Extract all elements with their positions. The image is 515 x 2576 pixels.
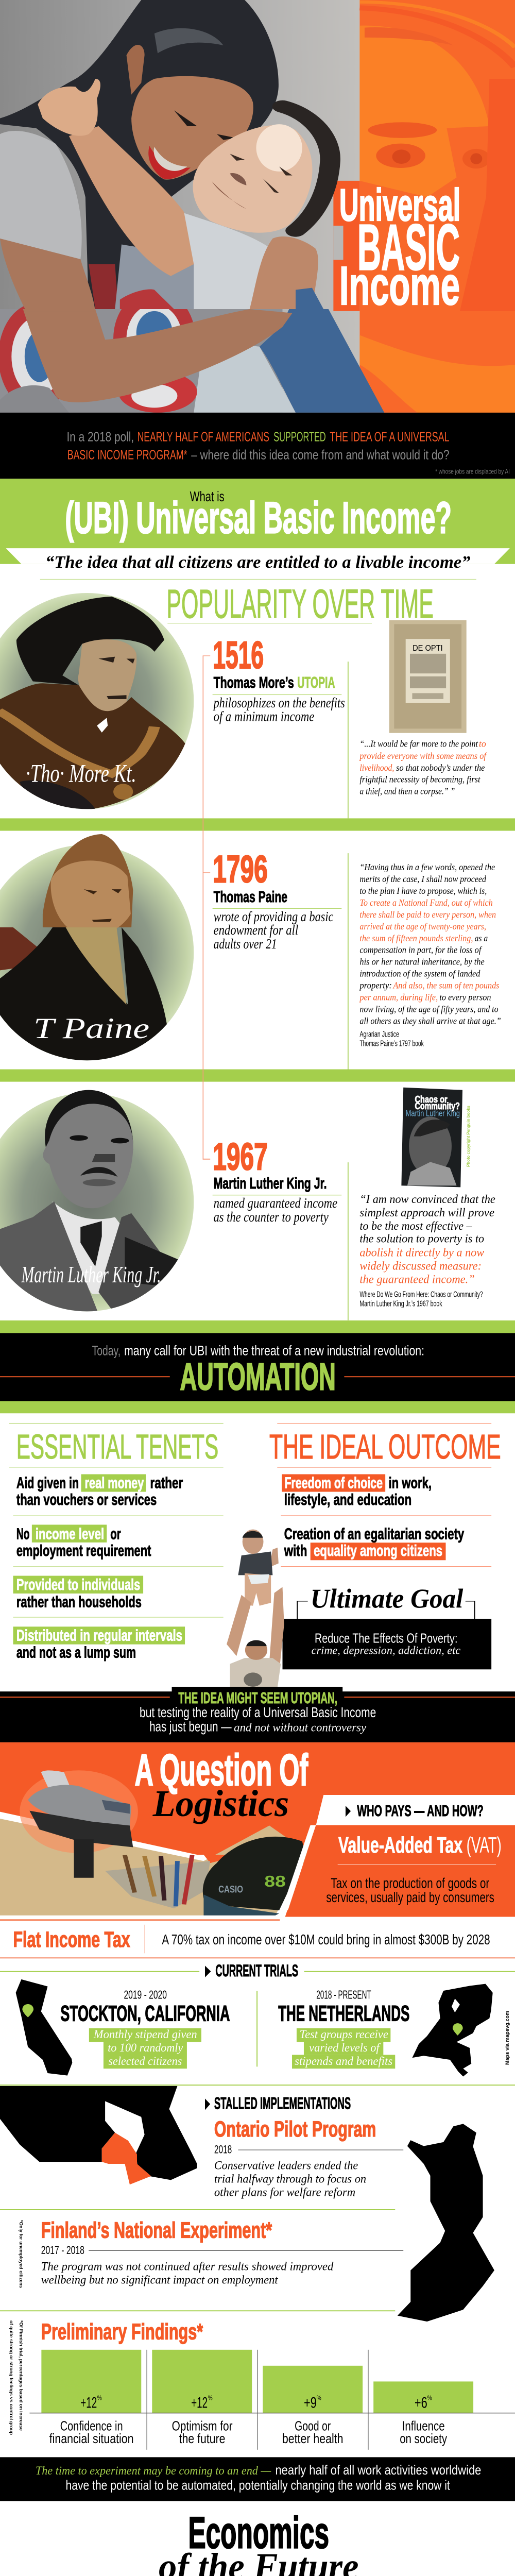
quote: Utopia: livelihood,	[359, 763, 394, 773]
trial: Ontario pilot program: other plans for welfare reform	[214, 2185, 355, 2199]
heading: a question of logistics: Logistics	[152, 1783, 289, 1824]
quote: Utopia	[359, 739, 487, 796]
text: basic endowment: adults over 21	[214, 936, 277, 952]
trial: Netherlands: 2018 - PRESENT	[316, 1988, 371, 2001]
text: 2018 poll statement: SUPPORTED	[273, 429, 326, 444]
trial: Netherlands	[278, 1988, 409, 2069]
panel: 1796 Thomas Paine	[213, 848, 501, 1070]
trial: Stockton: to 100 randomly	[108, 2041, 183, 2055]
panel: time to experiment band	[0, 2457, 515, 2501]
trial: Ontario pilot program: Conservative leaders ended the	[214, 2159, 358, 2173]
heading: stalled implementations	[205, 2094, 351, 2113]
chart: preliminary findings bars: Influence	[402, 2418, 445, 2433]
title: Universal Basic Income	[339, 179, 460, 316]
outcome: freedom of choice: Freedom of choice	[284, 1474, 383, 1492]
quote: Agrarian Justice: property:	[359, 980, 392, 991]
panel: automation band	[0, 1320, 515, 1413]
tenet: real money	[16, 1474, 183, 1509]
values: percent increases: +9	[304, 2394, 317, 2411]
panel: the idea might seem utopian	[0, 1687, 515, 1742]
labels: findings categories: financial situation	[49, 2431, 134, 2446]
text: 2018 poll statement: In a 2018 poll,	[66, 429, 134, 444]
heading: Thomas More's Utopia	[214, 673, 335, 691]
tenet: income level: or	[110, 1525, 121, 1543]
quote: Agrarian Justice	[359, 862, 501, 1048]
panel: essential tenets: Distributed in regular intervals	[16, 1626, 182, 1644]
outcome: egalitarian society: with	[284, 1541, 307, 1559]
text: Finland details	[41, 2244, 403, 2286]
trial: Netherlands: Test groups receive	[300, 2027, 388, 2041]
heading: Thomas More's Utopia: Thomas More’s	[214, 673, 294, 691]
text: basic endowment: endowment for all	[214, 922, 298, 938]
panel: essential tenets: rather	[150, 1474, 183, 1492]
text: philosophizes	[213, 695, 345, 724]
labels: findings categories: Good or	[295, 2418, 331, 2433]
portrait: Martin Luther King Jr.	[0, 1090, 197, 1314]
panel: 1967 Martin Luther King: 1967	[213, 1135, 268, 1178]
panel: the ideal outcome	[227, 1423, 501, 1687]
panel: current trials	[0, 1962, 515, 2086]
panel: 1967 Martin Luther King: Community?	[415, 1101, 460, 1111]
quote: Utopia: to	[479, 739, 486, 749]
trial: Ontario pilot program	[214, 2117, 403, 2199]
panel: essential tenets: rather than households	[16, 1593, 142, 1611]
panel: 1796 Thomas Paine: Thomas Paine	[214, 888, 287, 906]
tenet: provided to individuals	[13, 1575, 143, 1611]
signature: T Paine: T Paine	[33, 1012, 149, 1045]
panel: flat income tax: Flat Income Tax	[13, 1927, 130, 1952]
panel: 1796 Thomas Paine: wrote of providing a basic	[214, 909, 333, 925]
image: Chaos or Community book	[401, 1088, 462, 1187]
portrait: Thomas More	[0, 593, 194, 809]
heading: current trials	[205, 1962, 298, 1980]
heading: what is UBI: What is	[190, 489, 225, 505]
text: 2018 poll statement	[66, 429, 510, 475]
labels: findings categories: Optimism for	[172, 2418, 233, 2433]
photo: desk with terminal and cash register: CASIO	[218, 1884, 243, 1895]
quote: Chaos or Community	[359, 1193, 495, 1308]
panel: current trials: STOCKTON, CALIFORNIA	[60, 2002, 230, 2026]
text: guaranteed income: as the counter to poverty	[214, 1209, 329, 1225]
timeline: orange vertical connector	[203, 655, 210, 1160]
tenet: regular intervals: and not as a lump sum	[16, 1643, 136, 1661]
text: today: Today,	[92, 1343, 121, 1359]
image: Utopia book cover: DE OPTI	[413, 644, 443, 653]
chart: preliminary findings bars: on society	[400, 2431, 447, 2446]
photo: desk with terminal and cash register: 88	[264, 1872, 286, 1890]
trial: Netherlands: varied levels of	[309, 2041, 381, 2055]
panel: stalled implementations	[0, 2086, 403, 2199]
trial: Ontario pilot program: 2018	[214, 2143, 232, 2156]
text: basic endowment	[214, 909, 333, 952]
text: Finland details: wellbeing but no significant impact on employment	[41, 2273, 278, 2286]
panel: 1516 Thomas More: UTOPIA	[297, 673, 335, 691]
panel: essential tenets	[9, 1423, 224, 1661]
caption: finnish trial note: *Of Finnish trial, percentages based on increase	[18, 2320, 24, 2431]
caption: maps credit: Maps via mapsvg.com	[505, 2011, 510, 2065]
quote: Agrarian Justice: as a	[475, 934, 488, 943]
panel: flat income tax	[0, 1925, 515, 1958]
labels: findings categories	[49, 2418, 447, 2446]
values: percent increases: %	[317, 2394, 321, 2401]
text: Martin Luther King Jr.	[21, 1261, 161, 1287]
panel: what is UBI	[0, 479, 515, 580]
panel: intro poll band	[0, 413, 515, 479]
caption: only for unemployed: *Only for unemployed citizens	[18, 2220, 24, 2288]
panel: 1516 Thomas More	[213, 620, 487, 818]
trial: Netherlands: stipends and benefits	[295, 2055, 392, 2068]
panel: current trials: CURRENT TRIALS	[215, 1962, 298, 1980]
caption: finnish trial note	[8, 2320, 24, 2435]
values: percent increases: +12	[80, 2394, 97, 2411]
text: philosophizes: of a minimum income	[214, 709, 314, 724]
panel: time to experiment band: The time to experiment may be coming to an end —	[36, 2464, 271, 2478]
outcome: freedom of choice	[282, 1474, 432, 1509]
tenet: real money: than vouchers or services	[16, 1491, 157, 1509]
values: percent increases: %	[208, 2394, 213, 2401]
tenet: income level: No	[16, 1525, 29, 1543]
panel: 1516 Thomas More: philosophizes on the benefits	[213, 695, 345, 711]
chart: preliminary findings bars	[29, 2319, 515, 2450]
image: Chaos or Community book: Chaos or	[415, 1094, 448, 1105]
panel: the idea might seem utopian: and not without controversy	[234, 1721, 367, 1734]
text: 2018 poll statement: BASIC INCOME PROGRAM*	[67, 447, 187, 462]
tenet: real money: real money	[85, 1474, 144, 1492]
caption: photo copyright: Photo copyright Penguin books	[466, 1105, 471, 1167]
panel: essential tenets: Provided to individuals	[16, 1575, 140, 1594]
trial: Stockton: Monthly stipend given	[93, 2027, 197, 2041]
values: percent increases: +6	[415, 2394, 427, 2411]
heading: economics of the future	[159, 2508, 358, 2576]
chart: preliminary findings bars: Preliminary Findings*	[41, 2319, 203, 2344]
labels: findings categories: better health	[282, 2431, 344, 2446]
panel: 1967 Martin Luther King	[213, 1088, 495, 1320]
chart: preliminary findings bars: %	[427, 2394, 432, 2401]
text: value-added tax	[326, 1832, 502, 1905]
divider band	[0, 1070, 515, 1082]
caption: finnish trial note: of quite strong or strong feelings vs control group	[8, 2320, 14, 2435]
labels: findings categories: Confidence in	[60, 2418, 123, 2433]
trial: Ontario pilot program: trial halfway through to focus on	[214, 2172, 366, 2186]
image: Utopia book cover	[389, 620, 467, 733]
panel: orange Franklin banknote	[333, 0, 515, 413]
map: Canada with Ontario	[0, 2086, 197, 2184]
tenet: real money: Aid given in	[16, 1474, 79, 1492]
values: percent increases	[80, 2394, 432, 2411]
panel: hero	[0, 0, 515, 413]
callout: ultimate goal	[283, 1583, 491, 1669]
portrait: Thomas Paine	[0, 834, 194, 1061]
trial: Stockton: 2019 - 2020	[124, 1988, 167, 2001]
map: Finland	[398, 2124, 494, 2321]
heading: a question of logistics	[134, 1745, 308, 1824]
trial: Stockton	[60, 1988, 230, 2069]
map: California	[16, 1979, 72, 2076]
text: Finland details: 2017 - 2018	[41, 2244, 84, 2257]
callout: who pays and how	[316, 1795, 515, 1825]
outcome: egalitarian society	[284, 1525, 465, 1560]
text: 2018 poll statement: NEARLY HALF OF AMERICANS	[138, 429, 269, 444]
labels: findings categories: the future	[179, 2431, 226, 2446]
tenet: income level: income level	[36, 1525, 104, 1543]
text: guaranteed income	[214, 1195, 337, 1225]
quote: Agrarian Justice: Agrarian Justice	[359, 1029, 399, 1039]
divider band	[0, 818, 515, 831]
map: Netherlands	[412, 1984, 493, 2076]
panel: the idea might seem utopian: has just begun —	[149, 1719, 232, 1735]
panel: 1967 Martin Luther King: Martin Luther King Jr.	[214, 1174, 327, 1192]
quote: Agrarian Justice: per annum, during life,	[359, 992, 438, 1003]
panel: a question of logistics	[0, 1742, 515, 1925]
panel: the ideal outcome: in work,	[389, 1474, 432, 1492]
portrait: Thomas More: ·Tho· More Kt.	[26, 759, 136, 788]
panel: 1516 Thomas More: 1516	[213, 633, 264, 676]
values: percent increases: %	[97, 2394, 102, 2401]
trial: Stockton: selected citizens	[108, 2055, 182, 2068]
photo: desk with terminal and cash register	[0, 1770, 329, 1920]
tenet: income level	[16, 1524, 151, 1559]
values: percent increases: +12	[191, 2394, 208, 2411]
tenet: regular intervals	[13, 1626, 185, 1661]
panel: Finland national experiment	[0, 2124, 494, 2321]
panel: 1967 Martin Luther King: named guaranteed income	[214, 1195, 337, 1211]
panel: 1796 Thomas Paine: 1796	[213, 848, 268, 891]
photo: mother and son embracing	[0, 0, 330, 312]
panel: essential tenets: employment requirement	[16, 1541, 151, 1559]
photo: man tossing baby	[227, 1530, 284, 1687]
